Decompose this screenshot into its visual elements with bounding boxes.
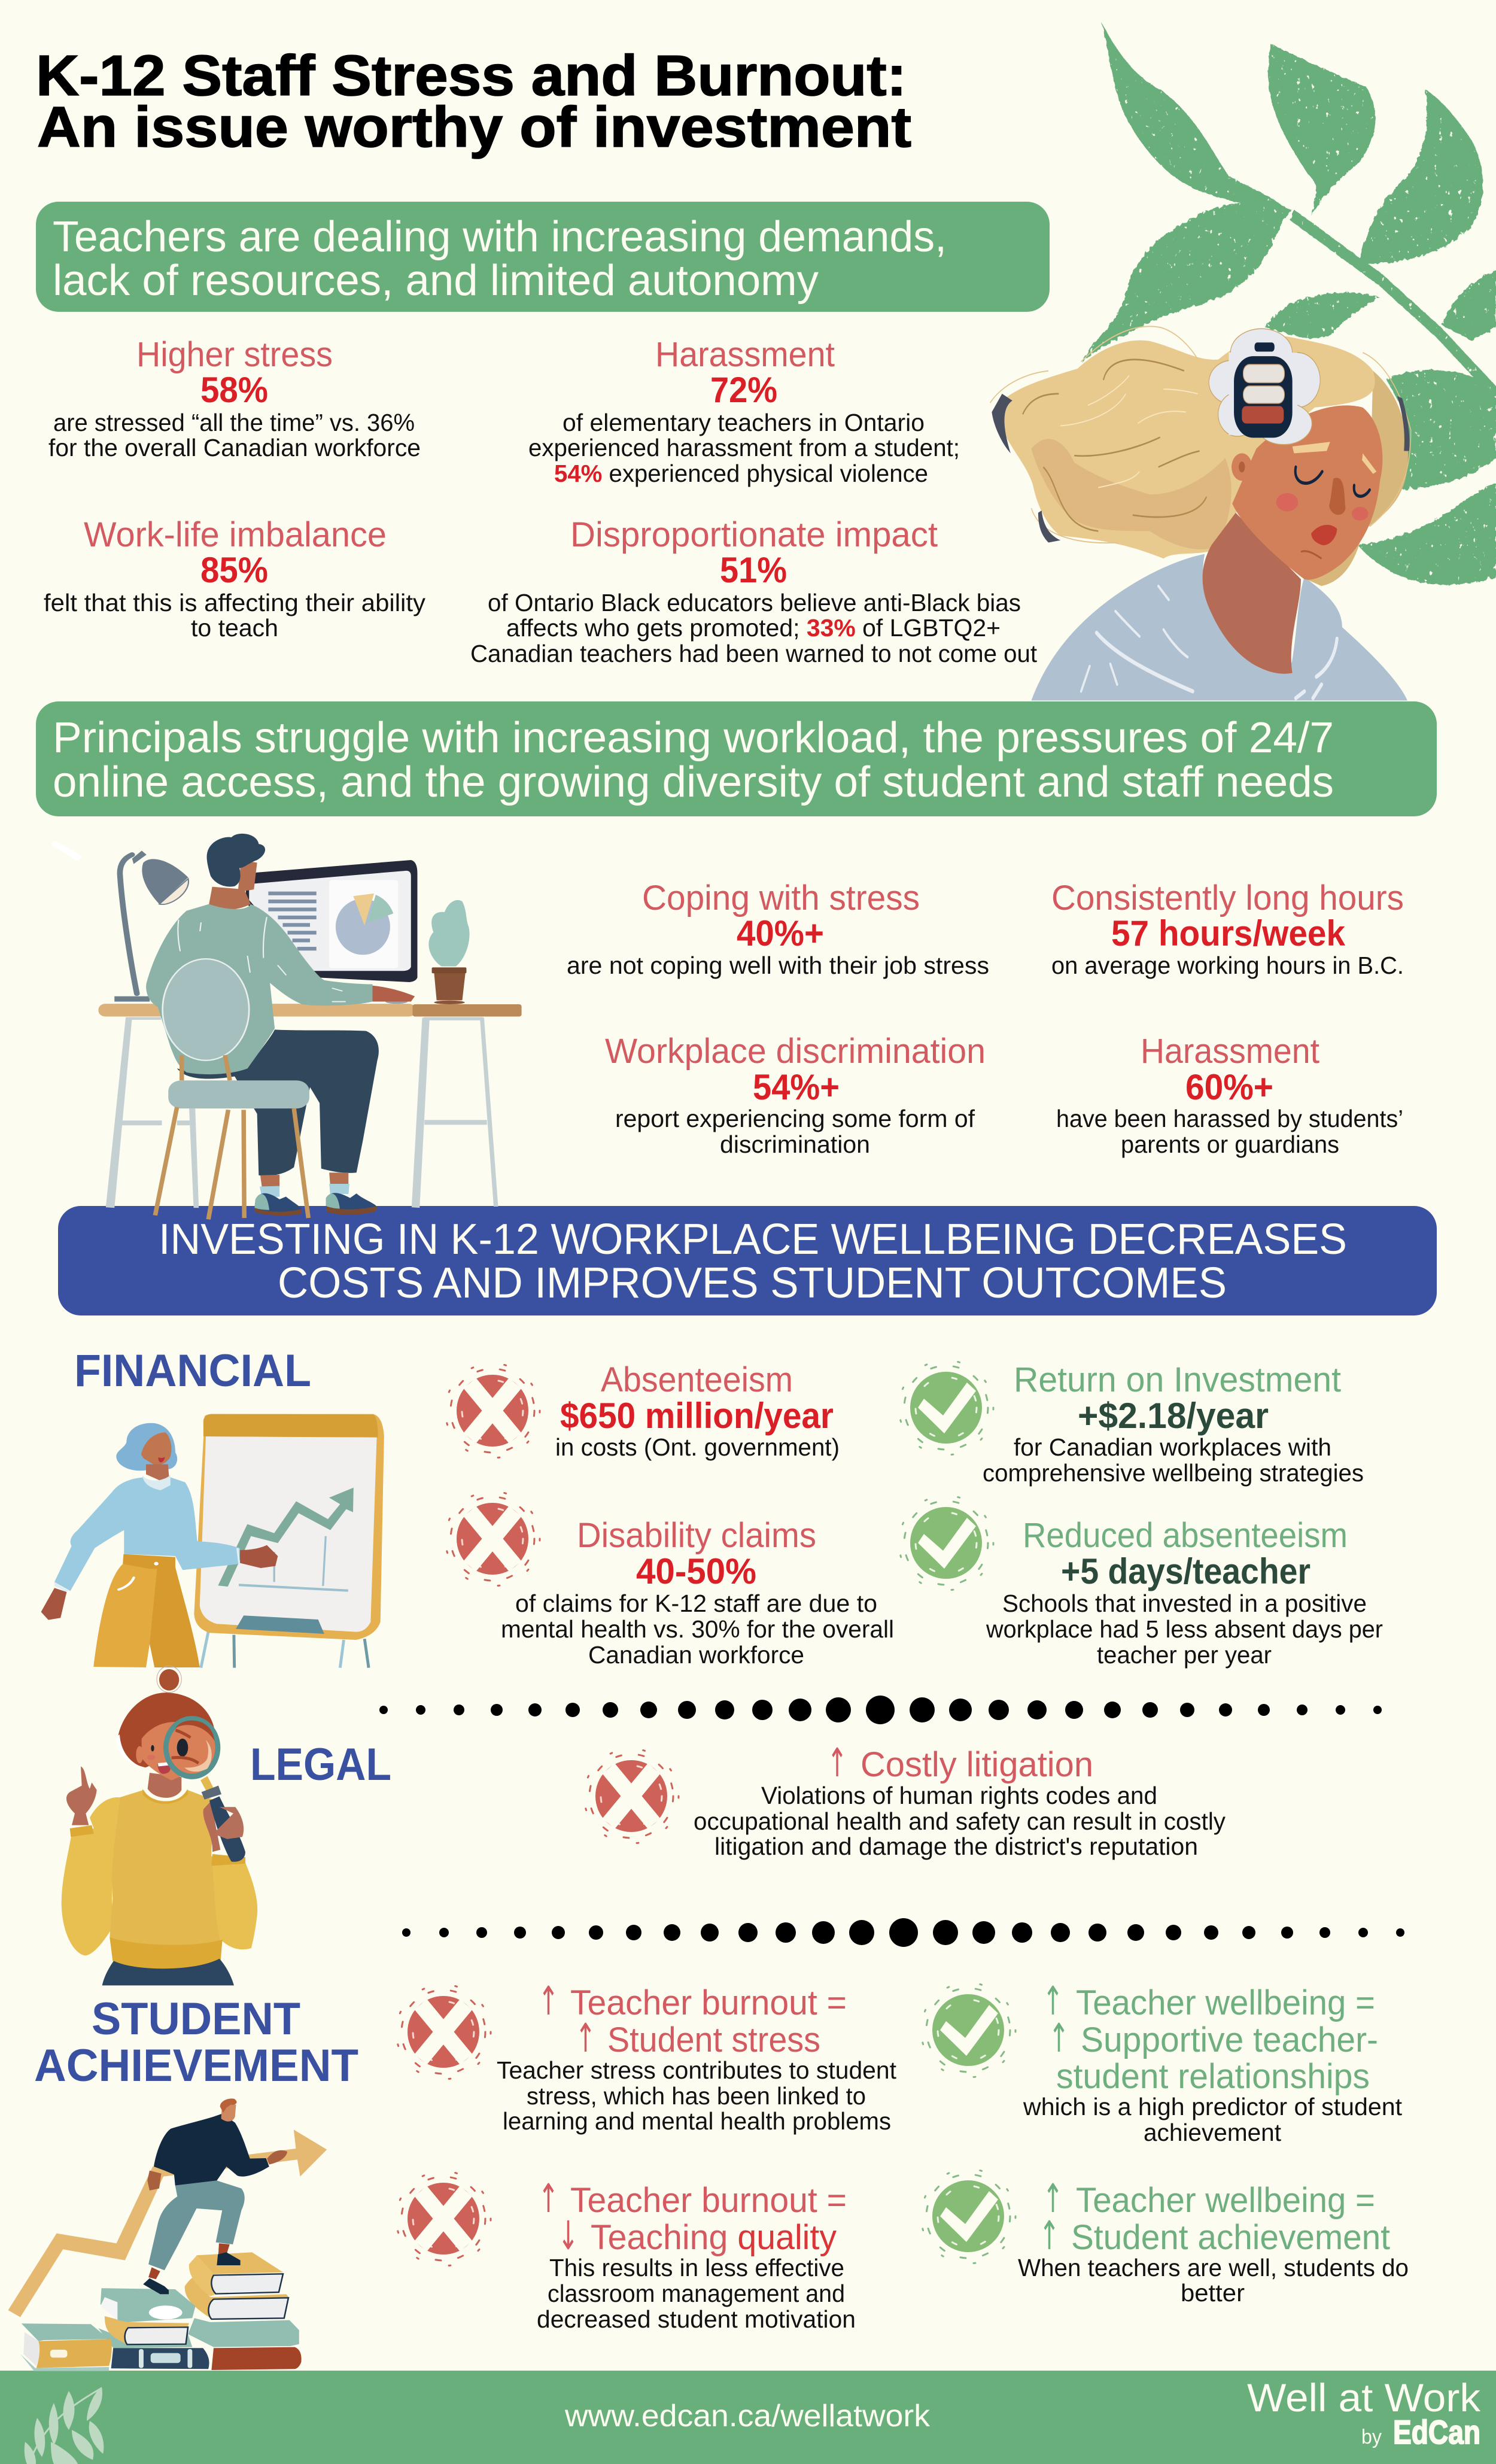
financial: reduced absenteeism: teacher per year xyxy=(1097,1641,1272,1669)
student: wellbeing and achievement: Teacher wellbeing = xyxy=(1076,2181,1375,2220)
leaf branch background xyxy=(1081,23,1496,585)
financial: reduced absenteeism: workplace had 5 less absent days per xyxy=(986,1615,1383,1643)
student: burnout and teaching quality xyxy=(396,2171,856,2333)
heading: student achievement: STUDENT xyxy=(92,1994,300,2044)
man hand xyxy=(372,986,415,1002)
student: burnout and stress: ↑ xyxy=(575,2015,596,2061)
woman face xyxy=(1232,405,1382,580)
magnifying glass xyxy=(166,1719,245,1862)
student: burnout and stress: Teacher stress contributes to student xyxy=(497,2056,897,2084)
banner: principals: Principals struggle with increasing workload, the pressures of 24/7 xyxy=(53,714,1334,762)
student: burnout and teaching quality: ↑ xyxy=(538,2176,559,2222)
stat: coping with stress: are not coping well with their job stress xyxy=(567,952,989,979)
dotted divider two xyxy=(402,1918,1404,1947)
icon: check xyxy=(921,2169,1015,2264)
student: wellbeing and relationships: Supportive teacher- xyxy=(1081,2021,1378,2059)
financial: return on investment: +$2.18/year xyxy=(1078,1396,1269,1436)
presenter xyxy=(41,1423,278,1667)
heading: student achievement: ACHIEVEMENT xyxy=(34,2040,358,2091)
potted plant xyxy=(428,900,470,1004)
student: wellbeing and achievement: ↑ xyxy=(1042,2176,1063,2222)
banner: teachers: lack of resources, and limited autonomy xyxy=(53,257,819,305)
stat: harassment teachers: of elementary teachers in Ontario xyxy=(562,409,925,436)
student: burnout and stress: learning and mental health problems xyxy=(503,2107,891,2135)
financial: reduced absenteeism xyxy=(899,1496,1383,1669)
banner: principals: online access, and the growing diversity of student and staff needs xyxy=(53,758,1334,806)
financial: return on investment xyxy=(899,1360,1364,1487)
stat: higher stress: 58% xyxy=(200,370,268,410)
stat: harassment principals xyxy=(1056,1032,1403,1158)
banner: principals xyxy=(36,701,1437,816)
student: wellbeing and relationships: student relationships xyxy=(1056,2057,1370,2096)
man neck and hair xyxy=(207,834,265,910)
financial: absenteeism: $650 million/year xyxy=(560,1396,834,1436)
financial: absenteeism: Absenteeism xyxy=(601,1360,793,1399)
financial: return on investment: comprehensive wellbeing strategies xyxy=(983,1459,1364,1487)
legal: costly litigation: ↑ xyxy=(827,1740,847,1786)
stat: work-life imbalance xyxy=(44,515,426,642)
illustration: principal at computer desk xyxy=(55,834,522,1219)
financial: disability claims: mental health vs. 30% for the overall xyxy=(501,1615,894,1643)
student: burnout and stress xyxy=(396,1978,897,2135)
heading: legal: LEGAL xyxy=(250,1739,391,1790)
illustration: man climbing books xyxy=(8,2098,327,2371)
man sweater xyxy=(146,904,372,1074)
chair xyxy=(155,959,309,1219)
student: wellbeing and relationships xyxy=(921,1978,1403,2146)
footer website link: www.edcan.ca/wellatwork xyxy=(564,2399,931,2433)
rising arrow xyxy=(8,2129,327,2317)
stat: disproportionate impact xyxy=(470,515,1038,667)
stat: consistently long hours xyxy=(1051,879,1404,979)
neck and face xyxy=(136,1722,193,1798)
financial: disability claims: Canadian workforce xyxy=(588,1641,804,1669)
stat: harassment principals: Harassment xyxy=(1141,1032,1319,1071)
desk lamp xyxy=(114,850,188,1002)
stat: workplace discrimination: 54%+ xyxy=(753,1067,840,1107)
banner: investing: INVESTING IN K-12 WORKPLACE WELLBEING DECREASES xyxy=(159,1216,1347,1263)
stat: work-life imbalance: felt that this is affecting their ability xyxy=(44,589,426,616)
title xyxy=(36,44,911,159)
stat: coping with stress: 40%+ xyxy=(737,913,824,953)
dotted divider one xyxy=(379,1696,1382,1724)
stat: work-life imbalance: 85% xyxy=(200,550,268,590)
stat: disproportionate impact: 51% xyxy=(720,550,787,590)
illustration: woman presenting growth chart xyxy=(41,1414,384,1668)
stat: work-life imbalance: Work-life imbalance xyxy=(84,515,387,554)
student: burnout and teaching quality: decreased student motivation xyxy=(537,2305,856,2333)
stat: harassment principals: have been harassed by students’ xyxy=(1056,1105,1403,1132)
woman hair ties xyxy=(992,330,1410,543)
legal: costly litigation xyxy=(584,1740,1226,1860)
stat: workplace discrimination: Workplace discrimination xyxy=(605,1032,986,1071)
student: wellbeing and achievement: ↑ xyxy=(1039,2213,1060,2259)
computer monitor xyxy=(246,860,417,982)
icon: check xyxy=(921,1983,1015,2077)
stat: coping with stress: Coping with stress xyxy=(642,879,920,917)
student: burnout and stress: ↑ xyxy=(538,1978,559,2024)
heading: student achievement xyxy=(34,1994,358,2091)
student: wellbeing and relationships: achievement xyxy=(1144,2119,1282,2146)
icon: cross xyxy=(396,1985,491,2079)
man trousers xyxy=(177,1029,379,1175)
icon: cross xyxy=(396,2171,491,2266)
stat: coping with stress xyxy=(567,879,989,979)
stat: harassment principals: parents or guardians xyxy=(1121,1131,1339,1158)
financial: reduced absenteeism: +5 days/teacher xyxy=(1061,1551,1310,1591)
raised hand xyxy=(66,1766,97,1825)
legal: costly litigation: occupational health and safety can result in costly xyxy=(694,1807,1226,1835)
climbing man xyxy=(143,2098,287,2294)
stat: higher stress: Higher stress xyxy=(136,335,333,374)
student: wellbeing and achievement: better xyxy=(1181,2279,1245,2307)
student: wellbeing and relationships: which is a high predictor of student xyxy=(1023,2093,1403,2120)
stat: higher stress: for the overall Canadian workforce xyxy=(48,434,421,461)
footer logo: Well at Work xyxy=(1247,2375,1481,2420)
stat: workplace discrimination: report experiencing some form of xyxy=(615,1105,975,1132)
stat: harassment teachers: 54% experienced physical violence xyxy=(554,460,928,487)
legal: costly litigation: Costly litigation xyxy=(860,1745,1093,1784)
stat: consistently long hours: Consistently long hours xyxy=(1051,879,1404,917)
icon: cross xyxy=(445,1363,540,1458)
footer logo xyxy=(1247,2375,1481,2451)
stat: harassment teachers: 72% xyxy=(710,370,777,410)
student: wellbeing and achievement: When teachers are well, students do xyxy=(1018,2254,1409,2281)
financial: absenteeism: in costs (Ont. government) xyxy=(555,1433,840,1461)
financial: disability claims xyxy=(445,1491,894,1669)
growth arrow chart xyxy=(218,1488,354,1591)
stat: disproportionate impact: Canadian teachers had been warned to not come out xyxy=(470,640,1038,667)
woman hoodie xyxy=(1031,554,1407,700)
legal: costly litigation: Violations of human rights codes and xyxy=(761,1782,1157,1809)
student: burnout and teaching quality: This results in less effective xyxy=(549,2254,844,2281)
title: An issue worthy of investment xyxy=(37,95,911,159)
financial: disability claims: 40-50% xyxy=(636,1551,756,1591)
desk top xyxy=(98,1004,522,1017)
middle book stack xyxy=(98,2288,209,2369)
stat: disproportionate impact: Disproportionate impact xyxy=(570,515,938,554)
desk legs xyxy=(106,1017,498,1208)
student: wellbeing and achievement: Student achievement xyxy=(1071,2218,1390,2257)
heading: financial: FINANCIAL xyxy=(74,1345,311,1396)
student: wellbeing and relationships: ↑ xyxy=(1042,1978,1063,2024)
student: burnout and stress: stress, which has been linked to xyxy=(527,2082,866,2110)
financial: return on investment: for Canadian workplaces with xyxy=(1014,1433,1331,1461)
financial: reduced absenteeism: Schools that invested in a positive xyxy=(1002,1590,1367,1617)
woman neck xyxy=(1203,513,1301,674)
stat: higher stress: are stressed “all the time” vs. 36% xyxy=(53,409,415,436)
stat: workplace discrimination: discrimination xyxy=(720,1131,870,1158)
stat: consistently long hours: on average working hours in B.C. xyxy=(1051,952,1404,979)
stat: harassment teachers: experienced harassment from a student; xyxy=(528,434,960,461)
stat: disproportionate impact: affects who gets promoted; 33% of LGBTQ2+ xyxy=(506,614,1001,642)
stat: work-life imbalance: to teach xyxy=(191,614,278,642)
student: wellbeing and relationships: ↑ xyxy=(1048,2015,1069,2061)
footer bar xyxy=(0,2371,1496,2464)
banner: investing xyxy=(58,1206,1437,1315)
student: burnout and stress: Student stress xyxy=(607,2021,820,2059)
stat: harassment principals: 60%+ xyxy=(1185,1067,1273,1107)
footer logo: by xyxy=(1361,2426,1382,2448)
student: burnout and teaching quality: Teaching quality xyxy=(591,2218,837,2257)
financial: reduced absenteeism: Reduced absenteeism xyxy=(1023,1516,1348,1555)
banner: teachers: Teachers are dealing with increasing demands, xyxy=(53,213,947,261)
hair xyxy=(117,1666,215,1769)
icon: check xyxy=(899,1360,993,1455)
left book xyxy=(20,2323,112,2371)
stat: harassment teachers xyxy=(528,335,960,487)
banner: investing: COSTS AND IMPROVES STUDENT OUTCOMES xyxy=(278,1259,1227,1307)
right book stack xyxy=(185,2252,302,2370)
student: burnout and teaching quality: ↓ xyxy=(558,2213,579,2259)
financial: disability claims: Disability claims xyxy=(577,1516,816,1555)
battery hair clip xyxy=(1209,329,1320,445)
trousers xyxy=(102,1959,234,1985)
illustration: exhausted woman with low battery xyxy=(990,326,1411,700)
student: wellbeing and achievement xyxy=(921,2169,1409,2307)
student: burnout and teaching quality: classroom management and xyxy=(548,2280,845,2307)
student: wellbeing and relationships: Teacher wellbeing = xyxy=(1076,1983,1375,2022)
footer leaf sprig xyxy=(25,2387,104,2464)
icon: cross xyxy=(584,1749,679,1843)
student: burnout and stress: Teacher burnout = xyxy=(570,1983,847,2022)
illustration: woman with magnifying glass xyxy=(62,1666,257,1985)
student: burnout and teaching quality: Teacher burnout = xyxy=(570,2181,847,2220)
financial: return on investment: Return on Investment xyxy=(1014,1360,1341,1399)
man ankles and shoes xyxy=(254,1172,378,1216)
icon: check xyxy=(899,1496,993,1590)
sweater xyxy=(62,1789,257,1969)
financial: absenteeism xyxy=(445,1360,840,1461)
flip chart easel xyxy=(194,1414,384,1668)
stat: disproportionate impact: of Ontario Black educators believe anti-Black bias xyxy=(488,589,1021,616)
stat: consistently long hours: 57 hours/week xyxy=(1111,913,1346,953)
stat: harassment teachers: Harassment xyxy=(655,335,835,374)
stat: workplace discrimination xyxy=(605,1032,986,1158)
financial: disability claims: of claims for K-12 staff are due to xyxy=(515,1590,877,1617)
banner: teachers xyxy=(36,202,1050,312)
stat: higher stress xyxy=(48,335,421,461)
legal: costly litigation: litigation and damage the district's reputation xyxy=(714,1833,1198,1860)
icon: cross xyxy=(445,1491,540,1586)
title: K-12 Staff Stress and Burnout: xyxy=(36,44,907,108)
